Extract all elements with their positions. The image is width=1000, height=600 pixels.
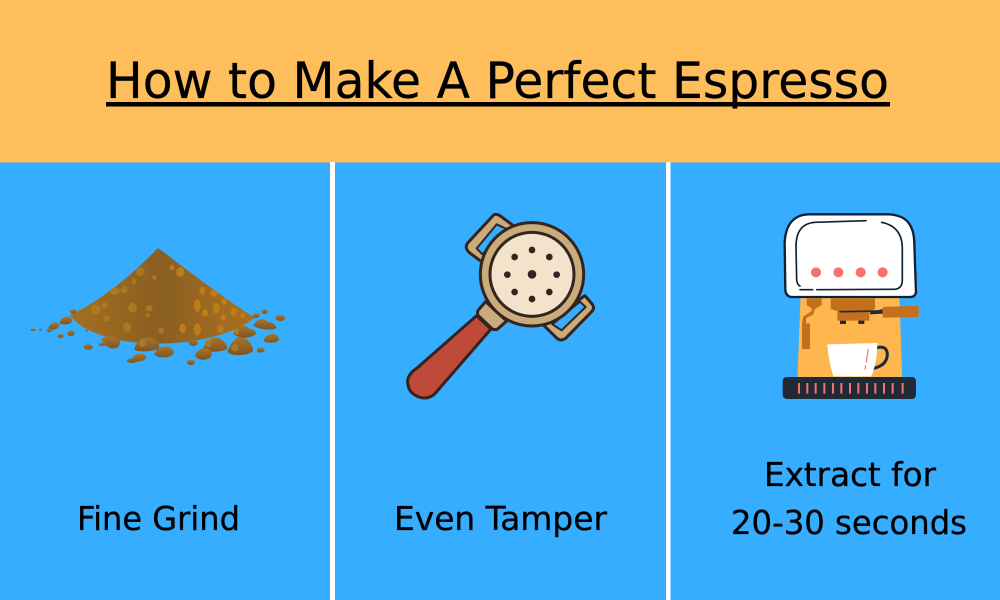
panel: fine grind xyxy=(30,248,285,538)
icon: portafilter xyxy=(408,214,593,398)
panel: extract xyxy=(731,214,967,542)
label: extract time: Extract for xyxy=(764,455,936,494)
icon: coffee grounds pile xyxy=(30,248,285,365)
label: fine grind: Fine Grind xyxy=(77,499,240,538)
icon: espresso machine xyxy=(783,214,919,399)
label: even tamper: Even Tamper xyxy=(394,499,607,538)
panel: even tamper xyxy=(394,214,607,538)
header band xyxy=(0,0,1000,162)
title: How to Make A Perfect Espresso xyxy=(106,52,889,110)
label: extract time xyxy=(731,455,967,542)
label: extract time: 20-30 seconds xyxy=(731,503,967,542)
